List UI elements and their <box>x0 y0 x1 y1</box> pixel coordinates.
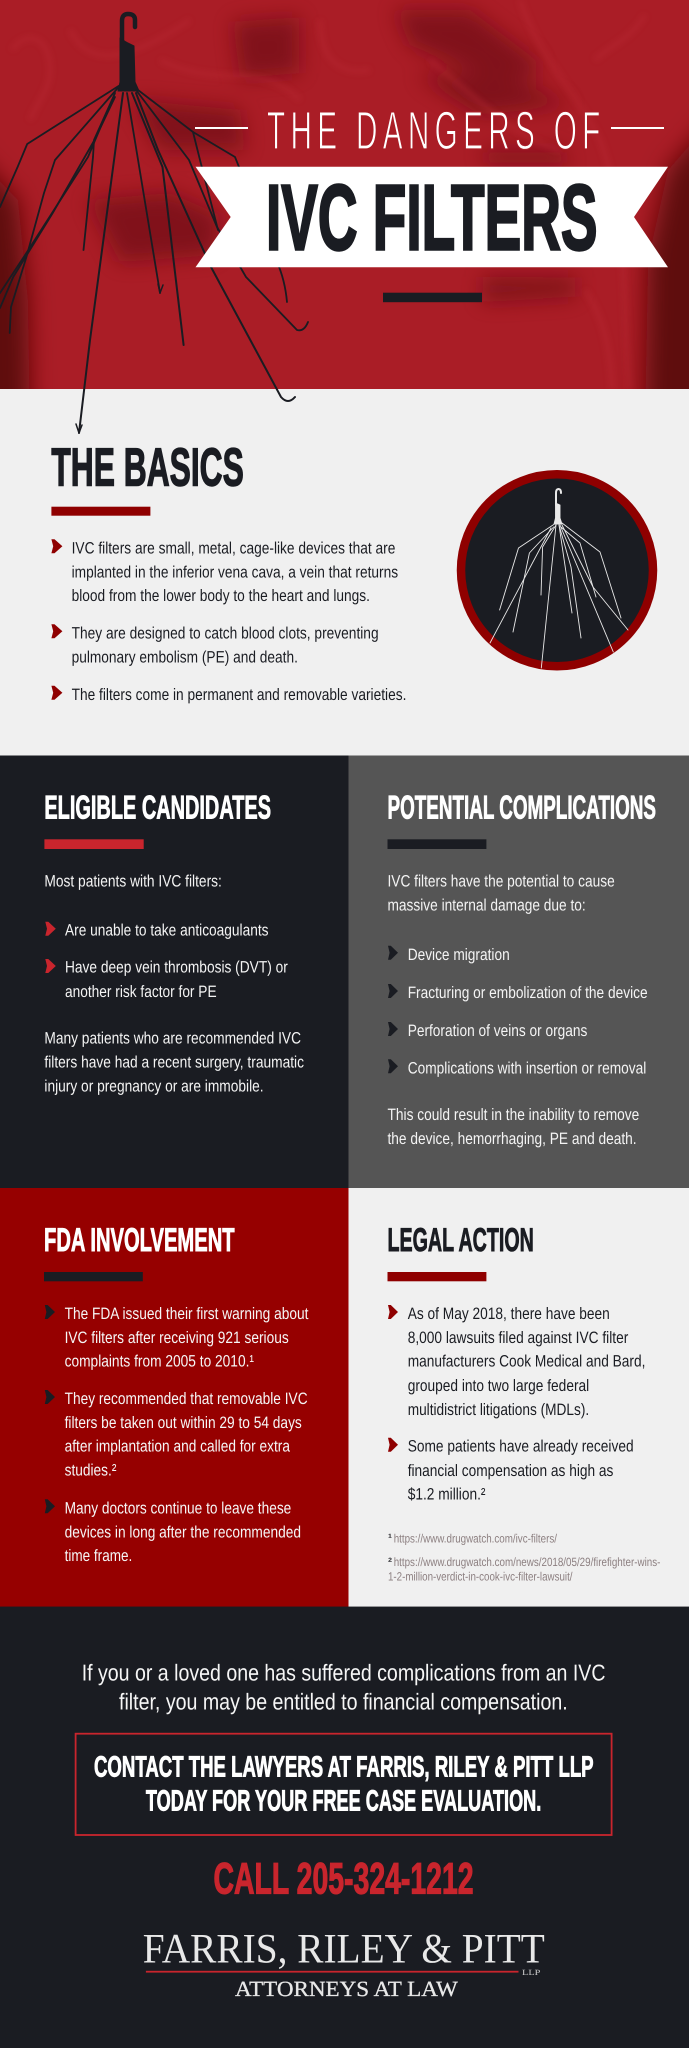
panel: legal action <box>348 1188 689 1607</box>
FDA bullet arrow 2 <box>45 1390 55 1404</box>
text block: legal action: manufacturers Cook Medical and Bard, <box>408 1353 645 1371</box>
text block: potential complications <box>388 873 648 1148</box>
text block: eligible candidates: another risk factor for PE <box>65 983 217 1001</box>
text block: legal action: grouped into two large federal <box>408 1377 589 1395</box>
heading rule left <box>195 127 248 129</box>
bullet 2 text <box>72 624 379 667</box>
text block: footer intro <box>82 1660 605 1714</box>
bullet 2 text: pulmonary embolism (PE) and death. <box>72 649 298 667</box>
text block: FDA involvement: Many doctors continue to leave these <box>65 1499 291 1517</box>
text block: footer intro: filter, you may be entitled to financial compensation. <box>119 1688 568 1714</box>
FDA accent bar <box>44 1272 143 1281</box>
legal bullet arrow 1 <box>388 1305 398 1319</box>
eligible accent bar <box>44 839 144 849</box>
heading: FDA involvement: FDA INVOLVEMENT <box>44 1221 235 1258</box>
text block: potential complications: massive internal damage due to: <box>388 897 586 915</box>
text block: FDA involvement: IVC filters after receiving 921 serious <box>65 1329 289 1347</box>
eligible bullet arrow 1 <box>45 922 56 936</box>
text block: legal action: Some patients have already received <box>408 1438 634 1456</box>
text block: FDA involvement <box>45 1305 309 1565</box>
bullet 2 text: They are designed to catch blood clots, preventing <box>72 624 379 642</box>
text block: basics bullets <box>51 539 406 704</box>
complications bullet arrow 1 <box>388 946 398 960</box>
text block: FDA involvement: filters be taken out within 29 to 54 days <box>65 1414 302 1432</box>
complications accent bar <box>388 839 486 849</box>
legal bullet arrow 2 <box>388 1438 398 1452</box>
footnotes: 1-2-million-verdict-in-cook-ivc-filter-lawsuit/ <box>388 1569 573 1583</box>
bullet 1 text: blood from the lower body to the heart and lungs. <box>72 587 370 605</box>
panel: eligible candidates <box>0 756 348 1188</box>
text block: FDA involvement: studies.² <box>65 1462 117 1480</box>
text block: eligible candidates: Most patients with IVC filters: <box>44 873 222 891</box>
text block: potential complications: Perforation of veins or organs <box>408 1022 587 1040</box>
text block: legal action: 8,000 lawsuits filed against IVC filter <box>408 1329 629 1347</box>
title: the dangers of: THE DANGERS OF <box>267 101 600 161</box>
bullet 3 arrow <box>51 686 62 700</box>
basics accent bar <box>51 507 150 516</box>
text block: eligible candidates <box>44 873 304 1095</box>
footnotes: ² <box>388 1555 392 1569</box>
text block: FDA involvement: They recommended that removable IVC <box>65 1390 308 1408</box>
text block: eligible candidates: injury or pregnancy or are immobile. <box>44 1077 264 1095</box>
bullet 3 text: The filters come in permanent and removable varieties. <box>72 686 406 704</box>
text block: potential complications: Device migration <box>408 946 510 964</box>
text block: potential complications: Fracturing or embolization of the device <box>408 984 648 1002</box>
ribbon banner <box>196 167 668 267</box>
heading: legal action: LEGAL ACTION <box>388 1221 534 1258</box>
text block: footer intro: If you or a loved one has suffered complications from an IVC <box>82 1660 605 1686</box>
panel: the basics background <box>0 389 689 756</box>
text block: FDA involvement: after implantation and called for extra <box>65 1438 291 1456</box>
text block: legal action: financial compensation as high as <box>408 1462 613 1480</box>
text block: FDA involvement: devices in long after the recommended <box>65 1523 301 1541</box>
footnotes: https://www.drugwatch.com/ivc-filters/ <box>394 1531 558 1545</box>
bullet 1 arrow <box>51 539 62 553</box>
header accent bar <box>383 293 482 302</box>
text block: potential complications: This could result in the inability to remove <box>388 1106 639 1124</box>
icon: circular filter badge <box>461 474 653 668</box>
bullet 1 text: IVC filters are small, metal, cage-like devices that are <box>72 539 395 557</box>
text block: eligible candidates: Have deep vein thrombosis (DVT) or <box>65 959 288 977</box>
panel: potential complications <box>348 756 689 1188</box>
panel: header x-ray background <box>0 0 689 420</box>
icon: black IVC filter illustration <box>0 14 308 433</box>
legal accent bar <box>388 1272 486 1281</box>
FDA bullet arrow 3 <box>45 1499 55 1513</box>
bullet 2 arrow <box>51 624 62 638</box>
bullet 1 text: implanted in the inferior vena cava, a vein that returns <box>72 563 398 581</box>
logo: Farris, Riley & Pitt: ATTORNEYS AT LAW <box>235 1977 458 2001</box>
text block: potential complications: Complications with insertion or removal <box>408 1059 646 1077</box>
text block: eligible candidates: filters have had a recent surgery, traumatic <box>44 1053 304 1071</box>
logo: Farris, Riley & Pitt: FARRIS, RILEY & PITT <box>143 1926 545 1972</box>
phone number: CALL 205-324-1212 <box>214 1854 474 1903</box>
logo: Farris, Riley & Pitt <box>143 1926 545 2001</box>
panel: footer call to action <box>0 1607 689 2048</box>
text block: potential complications: the device, hemorrhaging, PE and death. <box>388 1130 637 1148</box>
text block: legal action: multidistrict litigations (MDLs). <box>408 1401 589 1419</box>
eligible bullet arrow 2 <box>45 959 56 973</box>
footnotes: ¹ <box>388 1531 392 1545</box>
bullet 1 text <box>72 539 398 605</box>
heading rule right <box>611 127 664 129</box>
FDA bullet arrow 1 <box>45 1305 55 1319</box>
complications bullet arrow 3 <box>388 1022 398 1036</box>
text block: legal action: $1.2 million.² <box>408 1486 486 1504</box>
complications bullet arrow 4 <box>388 1059 398 1073</box>
heading: the basics: THE BASICS <box>51 438 244 498</box>
text block: legal action <box>388 1305 645 1504</box>
text block: potential complications: IVC filters have the potential to cause <box>388 873 615 891</box>
heading: eligible candidates: ELIGIBLE CANDIDATES <box>44 789 271 826</box>
text block: eligible candidates: Are unable to take anticoagulants <box>65 921 268 939</box>
text block: legal action: As of May 2018, there have been <box>408 1305 610 1323</box>
complications bullet arrow 2 <box>388 984 398 998</box>
footnotes <box>388 1531 660 1583</box>
text block: FDA involvement: complaints from 2005 to 2010.¹ <box>65 1353 254 1371</box>
panel: FDA involvement <box>0 1188 348 1607</box>
logo: Farris, Riley & Pitt: LLP <box>522 1968 541 1977</box>
text block: FDA involvement: time frame. <box>65 1547 132 1565</box>
callout box: contact the lawyers <box>76 1734 612 1835</box>
text block: eligible candidates: Many patients who are recommended IVC <box>44 1030 301 1048</box>
text block: FDA involvement: The FDA issued their first warning about <box>65 1305 309 1323</box>
